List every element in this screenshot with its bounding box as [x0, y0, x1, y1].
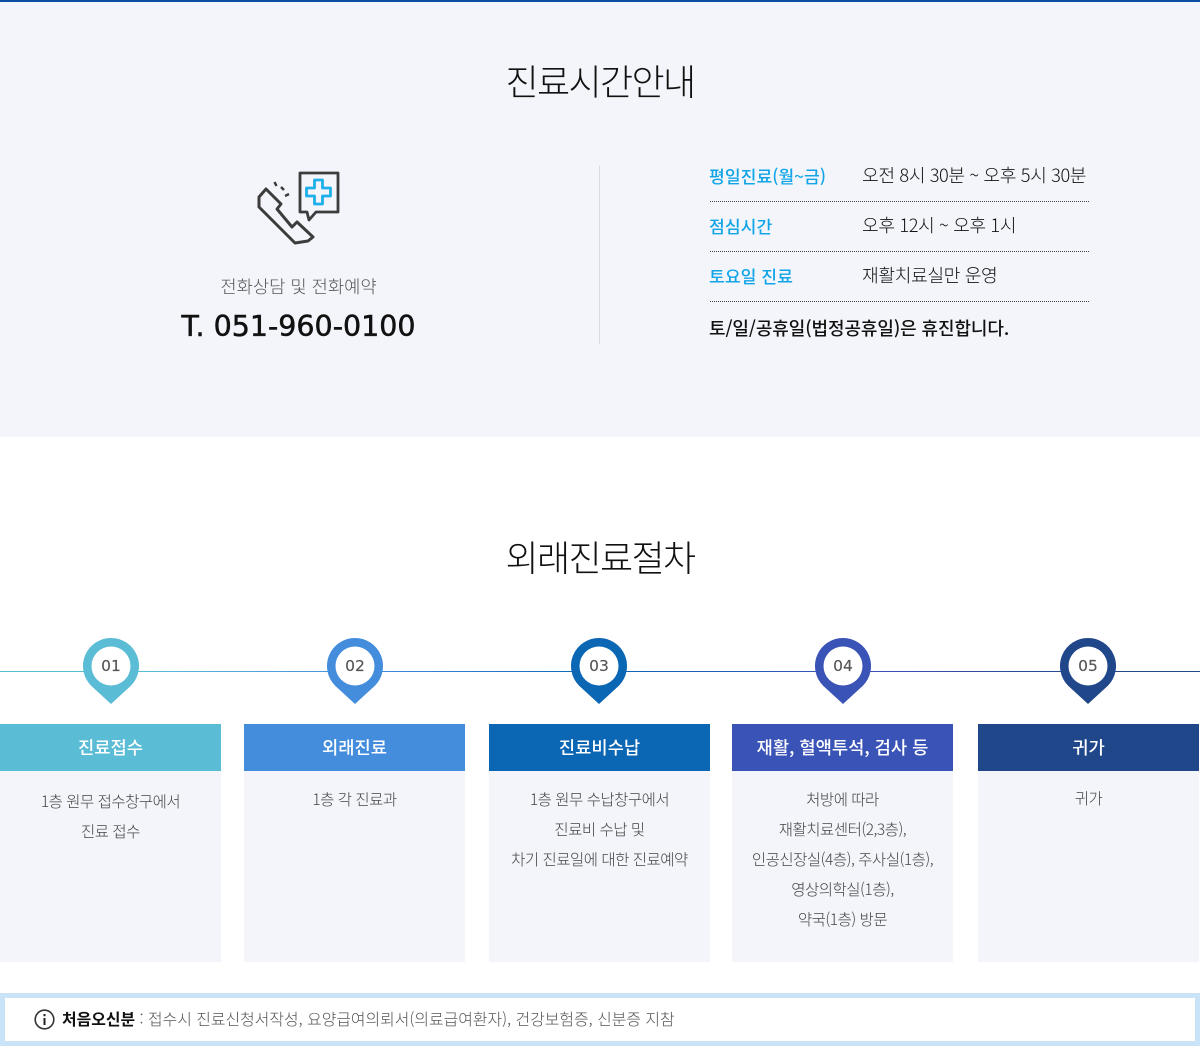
- notice text: 처음오신분 : 접수시 진료신청서작성, 요양급여의뢰서(의료급여환자), 건강보험증, 신분증 지참: [62, 1007, 675, 1030]
- label: lunch: 점심시간: [709, 213, 772, 238]
- step 4 body: 재활치료센터(2,3층),: [779, 818, 906, 840]
- step 5 body: [978, 771, 1199, 962]
- timeline line: [0, 671, 1200, 672]
- step 4 body: 인공신장실(4층), 주사실(1층),: [752, 848, 933, 870]
- step 3 body: 진료비 수납 및: [554, 818, 645, 840]
- step 4 header: 재활, 혈액투석, 검사 등: [757, 734, 928, 760]
- step 5 pin: [1060, 638, 1116, 704]
- step 5 body: 귀가: [1075, 787, 1102, 809]
- value: saturday: 재활치료실만 운영: [862, 262, 997, 288]
- step 2 body: 1층 각 진료과: [312, 788, 397, 810]
- label: saturday: 토요일 진료: [709, 263, 793, 288]
- step 4 pin: 04: [833, 657, 853, 675]
- label: weekday hours: 평일진료(월~금): [709, 163, 826, 188]
- step 1 pin: 01: [101, 657, 121, 675]
- step 4 pin: [815, 638, 871, 704]
- step 5 pin: 05: [1078, 657, 1098, 675]
- step 3 body: 1층 원무 수납창구에서: [530, 788, 669, 810]
- step 3 pin: 03: [589, 657, 609, 675]
- value: weekday hours: 오전 8시 30분 ~ 오후 5시 30분: [862, 162, 1086, 188]
- icon: info: [34, 1009, 55, 1030]
- step 3 body: [489, 771, 710, 962]
- step 4 header: [732, 724, 953, 771]
- value: lunch: 오후 12시 ~ 오후 1시: [862, 212, 1016, 238]
- step 5 header: [978, 724, 1199, 771]
- step 3 header: 진료비수납: [559, 734, 640, 760]
- step 4 body: [732, 771, 953, 962]
- step 2 header: [244, 724, 465, 771]
- step 3 header: [489, 724, 710, 771]
- step 1 header: 진료접수: [78, 734, 143, 760]
- step 4 body: 영상의학실(1층),: [791, 878, 894, 900]
- step 3 body: 차기 진료일에 대한 진료예약: [511, 848, 688, 870]
- step 1 header: [0, 724, 221, 771]
- divider: [599, 166, 600, 344]
- closed notice: 토/일/공휴일(법정공휴일)은 휴진합니다.: [709, 315, 1009, 341]
- icon: phone with medical speech bubble: [258, 172, 340, 244]
- heading: clinic hours: 진료시간안내: [505, 54, 695, 106]
- step 1 pin: [83, 638, 139, 704]
- step 4 body: 약국(1층) 방문: [798, 908, 887, 930]
- step 2 body: [244, 771, 465, 962]
- phone consultation caption: 전화상담 및 전화예약: [220, 273, 377, 299]
- step 4 body: 처방에 따라: [806, 788, 879, 810]
- step 1 body: 1층 원무 접수창구에서: [41, 790, 180, 812]
- notice box: first visit: [0, 993, 1200, 1046]
- step 5 header: 귀가: [1072, 734, 1105, 760]
- step 2 pin: 02: [345, 657, 365, 675]
- heading: outpatient procedure: 외래진료절차: [505, 530, 695, 582]
- step 2 pin: [327, 638, 383, 704]
- phone number: T. 051-960-0100: [181, 310, 416, 343]
- step 3 pin: [570, 638, 627, 704]
- step 1 body: 진료 접수: [81, 820, 140, 842]
- panel: clinic hours: [0, 0, 1200, 437]
- step 1 body: [0, 771, 221, 962]
- step 2 header: 외래진료: [322, 734, 387, 760]
